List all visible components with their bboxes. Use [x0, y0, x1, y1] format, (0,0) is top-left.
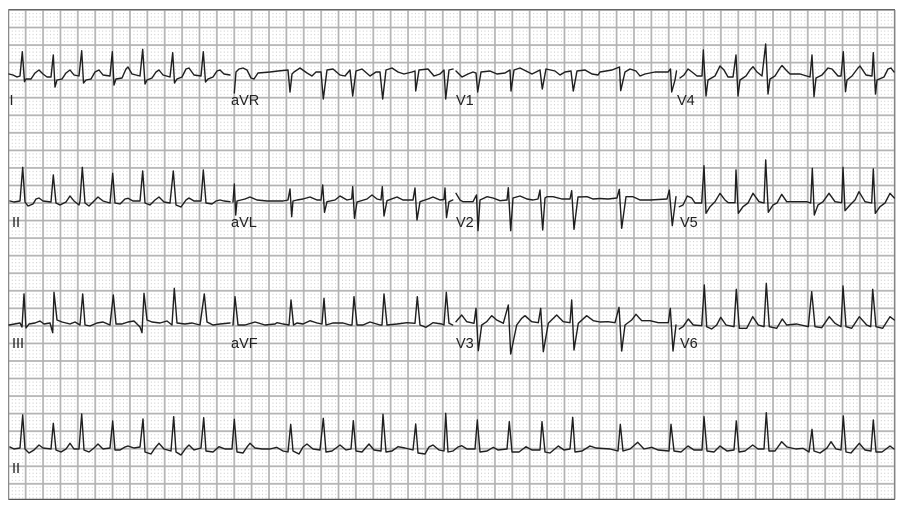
label V1: V1: [456, 93, 474, 109]
lead aVR: [231, 68, 453, 109]
label aVR: aVR: [231, 93, 259, 109]
lead aVF: [231, 292, 453, 352]
rhythm strip lead II: [10, 413, 894, 477]
label V6: V6: [680, 336, 698, 352]
label V4: V4: [677, 93, 695, 109]
lead II: [10, 167, 230, 231]
lead I: [9, 49, 230, 109]
label II: II: [12, 215, 20, 231]
lead V3: [456, 300, 676, 354]
label I: I: [10, 93, 14, 109]
label V3: V3: [456, 336, 474, 352]
label V5: V5: [680, 215, 698, 231]
label aVL: aVL: [231, 215, 257, 231]
lead III: [9, 288, 230, 352]
label II rhythm: II: [12, 461, 20, 477]
lead V2: [456, 188, 676, 231]
lead V5: [679, 160, 894, 231]
label III: III: [12, 336, 24, 352]
lead V4: [677, 44, 894, 109]
lead V1: [456, 67, 676, 109]
lead aVL: [231, 184, 453, 231]
label V2: V2: [456, 215, 474, 231]
label aVF: aVF: [231, 336, 258, 352]
lead V6: [679, 283, 894, 352]
